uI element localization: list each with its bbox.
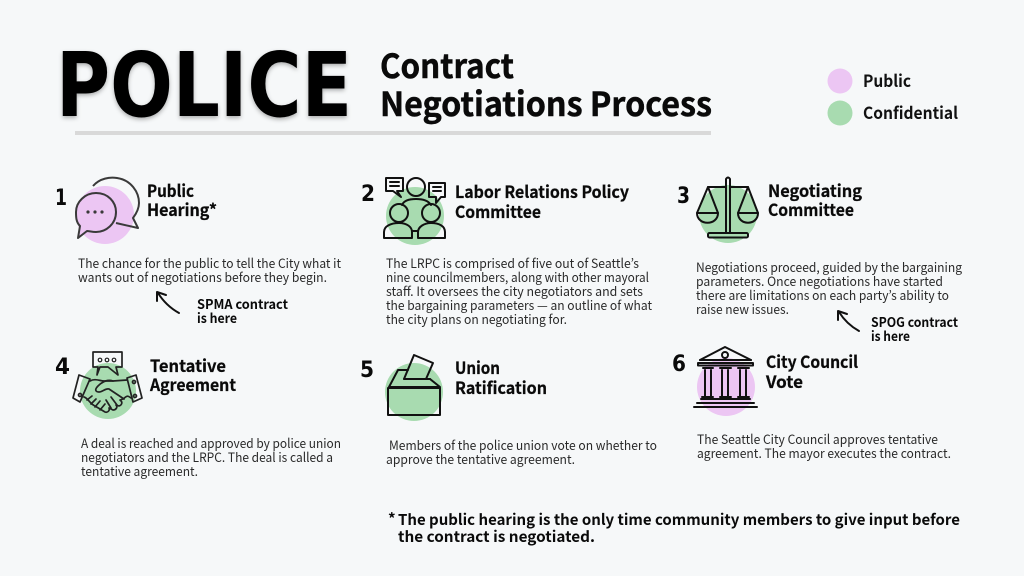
panel: step 6 city council vote xyxy=(672,347,951,462)
panel: step 4 tentative agreement xyxy=(55,352,341,480)
description: staff. It oversees the city negotiators and sets xyxy=(386,281,643,300)
heading: Ratification xyxy=(455,375,547,399)
callout: SPOG contract: SPOG contract xyxy=(871,312,958,331)
description xyxy=(78,253,341,286)
description: Negotiations proceed, guided by the bargaining xyxy=(696,257,963,276)
description: The LRPC is comprised of five out of Seattle’s xyxy=(386,253,639,272)
description: raise new issues. xyxy=(696,299,789,318)
description xyxy=(81,433,341,480)
number 1: 1 xyxy=(55,186,67,211)
description: tentative agreement. xyxy=(81,461,198,480)
heading: City Council xyxy=(766,349,858,373)
title: POLICE: POLICE xyxy=(56,33,352,137)
subtitle: Contract Negotiations Process: Contract xyxy=(380,40,514,88)
callout: SPMA contract: is here xyxy=(197,308,237,327)
description: The chance for the public to tell the City what it xyxy=(78,253,341,272)
heading xyxy=(768,178,862,221)
description: A deal is reached and approved by police union xyxy=(81,433,341,452)
description: Members of the police union vote on whether to xyxy=(389,435,657,454)
callout: SPOG contract: is here xyxy=(871,326,910,345)
legend: Confidential xyxy=(863,100,958,124)
description: nine councilmembers, along with other mayoral xyxy=(386,267,649,286)
description: wants out of negotiations before they begin. xyxy=(78,267,327,286)
heading: Labor Relations Policy xyxy=(455,179,630,203)
description xyxy=(386,253,652,328)
description: approve the tentative agreement. xyxy=(386,449,575,468)
description: agreement. The mayor executes the contract. xyxy=(697,443,951,462)
number 5: 5 xyxy=(360,358,374,383)
panel: step 5 union ratification xyxy=(360,355,657,468)
arrow xyxy=(157,292,179,313)
heading xyxy=(455,355,547,399)
footnote: * xyxy=(388,508,396,529)
footnote: The public hearing is the only time community members to give input before xyxy=(398,509,960,530)
heading: Hearing* xyxy=(147,197,217,221)
footnote xyxy=(388,508,960,547)
panel: step 1 public hearing xyxy=(55,178,341,327)
description: the city plans on negotiating for. xyxy=(386,309,567,328)
arrow xyxy=(838,311,859,331)
description: there are limitations on each party’s ability to xyxy=(696,285,949,304)
heading: Committee xyxy=(768,197,854,221)
subtitle: Contract Negotiations Process xyxy=(380,40,712,126)
number 6: 6 xyxy=(672,352,686,377)
panel: step 2 labor relations policy committee xyxy=(361,178,652,328)
description: the bargaining parameters — an outline of what xyxy=(386,295,652,314)
number 2: 2 xyxy=(361,182,375,207)
icon: ballot box xyxy=(385,355,443,421)
callout: SPMA contract: SPMA contract xyxy=(197,294,288,313)
icon: scales xyxy=(697,178,758,243)
heading xyxy=(455,179,630,223)
heading xyxy=(147,178,217,221)
description xyxy=(697,429,951,462)
number 4: 4 xyxy=(55,355,70,380)
heading: Agreement xyxy=(149,372,236,396)
heading: Negotiating xyxy=(768,178,862,202)
heading: Union xyxy=(455,355,500,379)
callout: SPMA contract xyxy=(197,294,288,327)
description xyxy=(386,435,657,468)
heading xyxy=(149,353,236,396)
heading xyxy=(765,349,858,393)
icon: speech bubbles xyxy=(76,178,139,244)
description: negotiators and the LRPC. The deal is called a xyxy=(81,447,333,466)
icon: handshake xyxy=(73,352,142,419)
footnote: the contract is negotiated. xyxy=(398,526,595,547)
legend xyxy=(828,68,958,126)
description: parameters. Once negotiations have started xyxy=(696,271,943,290)
icon: committee xyxy=(384,178,445,245)
description: The Seattle City Council approves tentative xyxy=(697,429,938,448)
icon: city hall xyxy=(694,347,757,416)
number 3: 3 xyxy=(677,184,690,209)
heading: Committee xyxy=(455,199,541,223)
description xyxy=(696,257,963,318)
heading: Tentative xyxy=(150,353,226,377)
subtitle: Contract Negotiations Process: Negotiations Process xyxy=(380,78,712,126)
legend: Public xyxy=(863,68,911,92)
heading: Public xyxy=(147,178,194,202)
callout: SPOG contract xyxy=(871,312,958,345)
panel: step 3 negotiating committee xyxy=(677,178,963,345)
heading: Vote xyxy=(765,369,803,393)
